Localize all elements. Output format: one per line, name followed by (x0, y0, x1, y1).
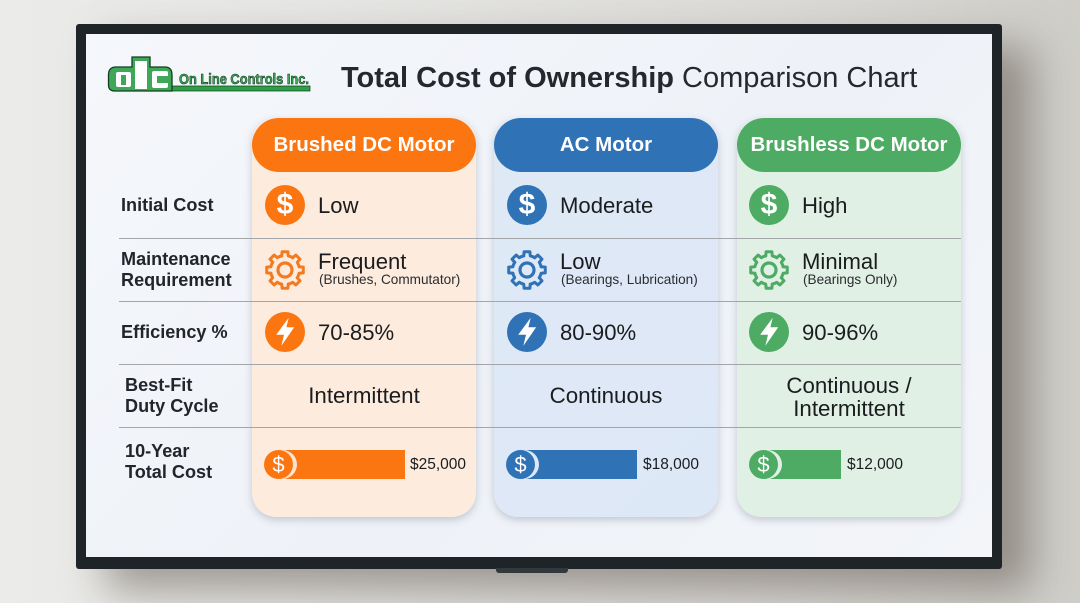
Brushed: efficiency value: 70-85% (318, 320, 394, 345)
Brushed: maintenance detail: (Brushes, Commutator) (319, 272, 460, 287)
Brushed: initial cost value: Low (318, 193, 359, 218)
AC: gear icon (507, 250, 547, 290)
Brushless: efficiency value: 90-96% (802, 320, 878, 345)
row label: Efficiency: Efficiency % (121, 322, 228, 342)
row label: Best-Fit Duty Cycle: Duty Cycle (125, 396, 219, 416)
monitor bezel (76, 24, 1002, 569)
Brushless: duty cycle: Continuous / (786, 373, 912, 398)
Brushed: maintenance value: Frequent (318, 249, 406, 274)
Brushless: cost bar (749, 450, 841, 479)
AC: bolt icon (507, 312, 547, 352)
title: Total Cost of Ownership Comparison Chart (341, 62, 917, 94)
AC: maintenance value: Low (560, 249, 601, 274)
row label: Best-Fit Duty Cycle: Best-Fit (125, 375, 192, 395)
Brushed: cost bar: $ (272, 452, 285, 477)
header: Brushless DC Motor: Brushless DC Motor (750, 133, 948, 156)
Brushed: cost bar (264, 450, 405, 479)
Brushless: gear icon (749, 250, 789, 290)
AC: initial cost icon (507, 185, 547, 225)
row label: Maintenance Requirement (121, 249, 232, 290)
Brushless: duty cycle: Intermittent (793, 396, 905, 421)
row label: 10-Year Total Cost (125, 441, 212, 482)
header: Brushed DC Motor: Brushed DC Motor (273, 133, 455, 156)
Brushless: cost bar: $ (757, 452, 770, 477)
logo (108, 56, 310, 92)
Brushless: initial cost value: High (802, 193, 847, 218)
panel: AC Motor (494, 118, 718, 517)
AC: duty cycle: Continuous (550, 383, 662, 408)
header: Brushless DC Motor (737, 118, 961, 172)
Brushed: duty cycle: Intermittent (308, 383, 420, 408)
panel: Brushless DC Motor (737, 118, 961, 517)
Brushless: duty cycle (786, 373, 912, 421)
Brushless: maintenance detail: (Bearings Only) (803, 272, 897, 287)
Brushed: cost amount: $25,000 (410, 456, 466, 473)
screen (86, 34, 992, 557)
row label: Maintenance Requirement: Requirement (121, 270, 232, 290)
Brushless: initial cost icon (749, 185, 789, 225)
Brushed: initial cost icon (265, 185, 305, 225)
row label: Maintenance Requirement: Maintenance (121, 249, 231, 269)
AC: initial cost value: Moderate (560, 193, 653, 218)
Brushless: initial cost icon: $ (761, 188, 777, 221)
header: AC Motor: AC Motor (560, 133, 652, 156)
row label: Initial Cost: Initial Cost (121, 195, 213, 215)
row label: 10-Year Total Cost: Total Cost (125, 462, 212, 482)
row label: 10-Year Total Cost: 10-Year (125, 441, 189, 461)
Brushed: bolt icon (265, 312, 305, 352)
Brushless: bolt icon (749, 312, 789, 352)
Brushed: initial cost icon: $ (277, 188, 293, 221)
AC: initial cost icon: $ (519, 188, 535, 221)
Brushed: gear icon (265, 250, 305, 290)
header: Brushed DC Motor (252, 118, 476, 172)
Brushless: cost amount: $12,000 (847, 456, 903, 473)
AC: maintenance detail: (Bearings, Lubrication) (561, 272, 698, 287)
monitor stand tab (496, 568, 568, 573)
AC: cost bar: $ (514, 452, 527, 477)
row label: Best-Fit Duty Cycle (125, 375, 219, 416)
Brushless: maintenance value: Minimal (802, 249, 878, 274)
AC: efficiency value: 80-90% (560, 320, 636, 345)
panel: Brushed DC Motor (252, 118, 476, 517)
AC: cost bar (506, 450, 637, 479)
AC: cost amount: $18,000 (643, 456, 699, 473)
header: AC Motor (494, 118, 718, 172)
